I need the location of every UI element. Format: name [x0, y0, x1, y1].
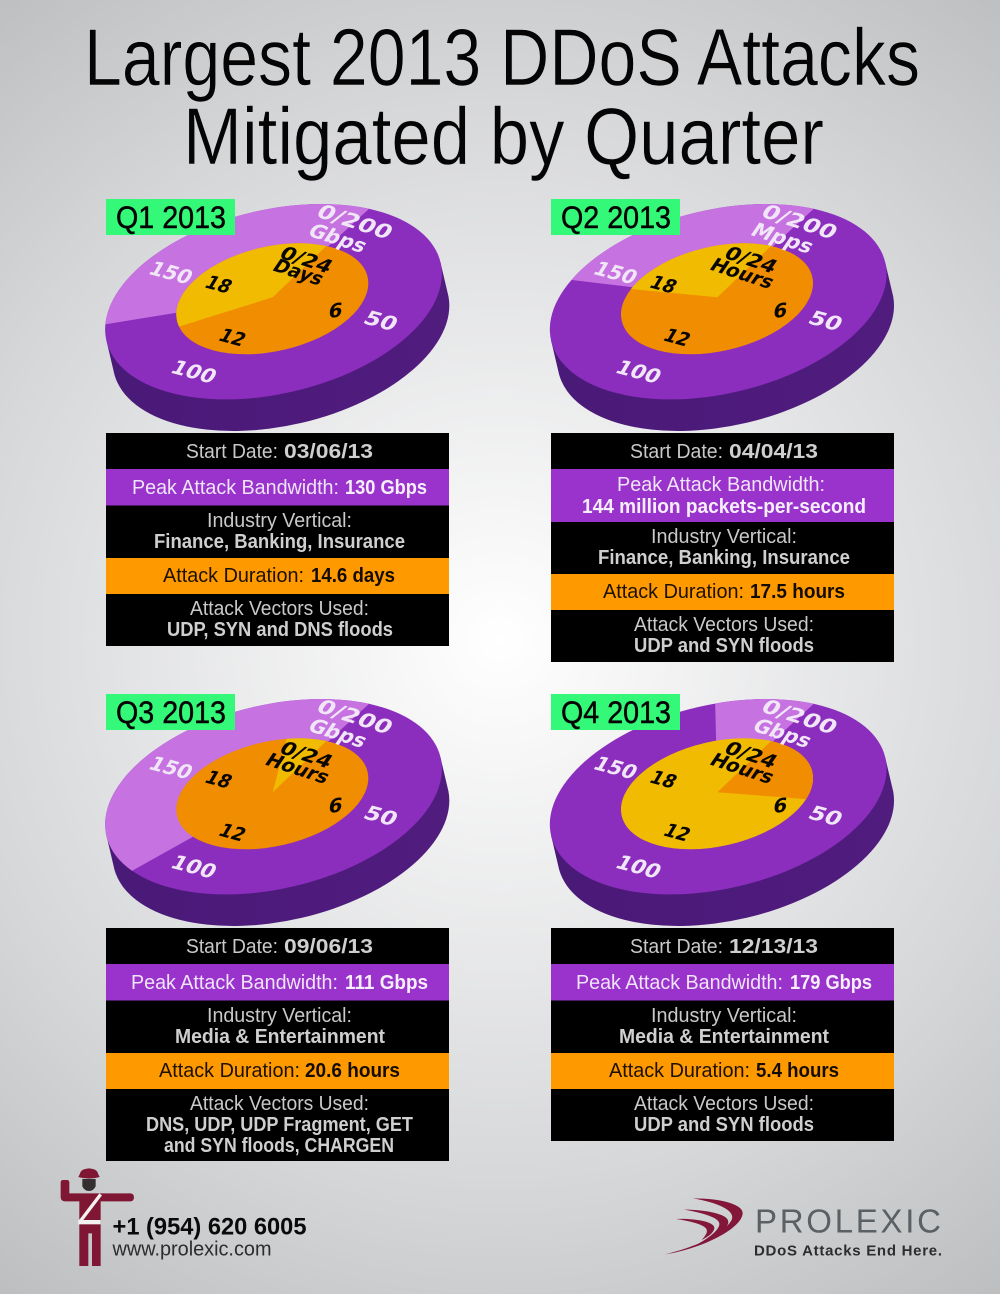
pie chart: Q3 bandwidth and duration: 0/200	[312, 695, 398, 739]
pie chart: Q2 bandwidth and duration: 100	[611, 356, 666, 388]
pie chart: Q1 bandwidth and duration: 150	[144, 257, 198, 289]
pie chart: Q1 bandwidth and duration: 0/200	[312, 200, 398, 244]
pie chart: Q3 bandwidth and duration: 100	[166, 851, 221, 883]
pie chart: Q3 bandwidth and duration: Hours	[261, 749, 335, 788]
data table: Q3 2013: 20.6 hours	[305, 1059, 400, 1082]
data table: Q4 2013	[551, 928, 894, 1141]
data table: Q1 2013	[106, 433, 449, 646]
pie chart: Q4 bandwidth and duration: Gbps	[748, 714, 817, 752]
panel: Q4 2013	[550, 694, 894, 1141]
pie chart: Q4 bandwidth and duration: 150	[589, 752, 642, 784]
panel: Q1 2013	[105, 199, 450, 646]
icon: Prolexic swoosh	[665, 1198, 743, 1254]
pie chart: Q3 bandwidth and duration: Gbps	[303, 714, 372, 752]
panel: Q3 2013	[105, 694, 450, 1161]
pie chart: Q3 bandwidth and duration: 0/24	[275, 737, 338, 773]
pie chart: Q4 bandwidth and duration: 6	[772, 793, 789, 818]
pie chart: Q2 bandwidth and duration: 12	[659, 324, 695, 351]
logo: Prolexic: DDoS Attacks End Here.	[754, 1243, 942, 1260]
data table: Q4 2013: UDP and SYN floods	[634, 1113, 814, 1136]
contact details	[112, 1214, 307, 1261]
data table: Q3 2013: Start Date:	[186, 935, 278, 958]
data table: Q1 2013: UDP, SYN and DNS floods	[167, 618, 393, 641]
data table: Q1 2013: Peak Attack Bandwidth:	[132, 476, 339, 499]
data table: Q2 2013: Peak Attack Bandwidth:	[617, 473, 825, 496]
data table: Q4 2013: 12/13/13	[729, 935, 818, 958]
pie chart: Q3 bandwidth and duration: 150	[144, 752, 198, 784]
pie chart: Q4 bandwidth and duration: 12	[659, 819, 695, 846]
data table: Q3 2013: DNS, UDP, UDP Fragment, GET	[146, 1113, 413, 1136]
label: Q3 2013: Q3 2013	[116, 694, 226, 730]
data table: Q4 2013: Peak Attack Bandwidth:	[576, 971, 783, 994]
data table: Q1 2013: 03/06/13	[284, 440, 373, 463]
data table: Q1 2013: Attack Duration:	[163, 564, 304, 587]
contact details: www.prolexic.com	[112, 1239, 272, 1261]
data table: Q1 2013: Finance, Banking, Insurance	[154, 530, 405, 553]
data table: Q3 2013: Peak Attack Bandwidth:	[131, 971, 338, 994]
pie chart: Q2 bandwidth and duration: 6	[772, 298, 789, 323]
data table: Q4 2013: Media & Entertainment	[619, 1025, 829, 1048]
pie chart: Q1 bandwidth and duration	[105, 204, 450, 431]
logo: Prolexic: PROLEXIC	[755, 1203, 941, 1240]
pie chart: Q3 bandwidth and duration: 6	[327, 793, 344, 818]
pie chart: Q4 bandwidth and duration: 18	[645, 766, 681, 793]
pie chart: Q4 bandwidth and duration: 50	[804, 801, 847, 830]
contact details: +1 (954) 620 6005	[112, 1214, 306, 1240]
data table: Q2 2013: Attack Duration:	[603, 580, 744, 603]
data table: Q2 2013: Start Date:	[630, 440, 723, 463]
data table: Q3 2013: 09/06/13	[284, 935, 373, 958]
data table: Q3 2013: and SYN floods, CHARGEN	[164, 1134, 394, 1157]
title	[84, 13, 920, 182]
pie chart: Q2 bandwidth and duration: 0/200	[757, 200, 843, 244]
data table: Q2 2013: 04/04/13	[729, 440, 818, 463]
pie chart: Q1 bandwidth and duration: 50	[359, 306, 403, 335]
data table: Q3 2013	[106, 928, 449, 1161]
pie chart: Q3 bandwidth and duration	[105, 699, 450, 926]
panel: Q2 2013	[550, 199, 894, 662]
data table: Q4 2013: Attack Vectors Used:	[634, 1092, 814, 1115]
data table: Q3 2013: Attack Vectors Used:	[190, 1092, 369, 1115]
pie chart: Q2 bandwidth and duration: 50	[804, 306, 847, 335]
data table: Q1 2013: Start Date:	[186, 440, 278, 463]
data table: Q4 2013: Industry Vertical:	[651, 1004, 797, 1027]
data table: Q4 2013: Start Date:	[630, 935, 723, 958]
label: Q1 2013: Q1 2013	[116, 199, 226, 235]
pie chart: Q1 bandwidth and duration: 6	[327, 298, 344, 323]
data table: Q2 2013: Industry Vertical:	[651, 525, 797, 548]
pie chart: Q2 bandwidth and duration: 0/24	[720, 242, 782, 278]
pie chart: Q4 bandwidth and duration	[550, 699, 894, 926]
pie chart: Q2 bandwidth and duration: Hours	[705, 254, 779, 293]
data table: Q2 2013: UDP and SYN floods	[634, 634, 814, 657]
data table: Q3 2013: 111 Gbps	[345, 971, 428, 994]
title: Mitigated by Quarter	[183, 92, 824, 182]
data table: Q2 2013: 144 million packets-per-second	[582, 495, 866, 518]
data table: Q4 2013: 5.4 hours	[756, 1059, 839, 1082]
pie chart: Q3 bandwidth and duration: 50	[359, 801, 403, 830]
data table: Q4 2013: 179 Gbps	[790, 971, 872, 994]
label: Q2 2013: Q2 2013	[561, 199, 671, 235]
pie chart: Q1 bandwidth and duration: 12	[214, 324, 250, 351]
pie chart: Q4 bandwidth and duration: Hours	[705, 749, 779, 788]
data table: Q3 2013: Industry Vertical:	[207, 1004, 352, 1027]
data table: Q2 2013: Finance, Banking, Insurance	[598, 546, 850, 569]
data table: Q3 2013: Attack Duration:	[159, 1059, 300, 1082]
data table: Q3 2013: Media & Entertainment	[175, 1025, 385, 1048]
data table: Q1 2013: 14.6 days	[311, 564, 395, 587]
icon: traffic policeman	[61, 1168, 134, 1266]
data table: Q2 2013: Attack Vectors Used:	[634, 613, 814, 636]
data table: Q1 2013: Attack Vectors Used:	[190, 597, 369, 620]
pie chart: Q1 bandwidth and duration: Days	[268, 255, 329, 290]
data table: Q2 2013: 17.5 hours	[750, 580, 845, 603]
data table: Q2 2013	[551, 433, 894, 662]
pie chart: Q1 bandwidth and duration: 0/24	[275, 242, 338, 278]
pie chart: Q1 bandwidth and duration: Gbps	[303, 219, 372, 257]
data table: Q4 2013: Attack Duration:	[609, 1059, 750, 1082]
pie chart: Q1 bandwidth and duration: 18	[201, 271, 237, 298]
label: Q4 2013: Q4 2013	[561, 694, 671, 730]
data table: Q1 2013: 130 Gbps	[345, 476, 427, 499]
pie chart: Q2 bandwidth and duration: Mpps	[746, 218, 819, 258]
pie chart: Q2 bandwidth and duration: 150	[589, 257, 642, 289]
pie chart: Q2 bandwidth and duration	[550, 204, 894, 431]
pie chart: Q4 bandwidth and duration: 0/200	[757, 695, 843, 739]
data table: Q1 2013: Industry Vertical:	[207, 509, 352, 532]
pie chart: Q2 bandwidth and duration: 18	[645, 271, 681, 298]
pie chart: Q3 bandwidth and duration: 12	[214, 819, 250, 846]
pie chart: Q4 bandwidth and duration: 100	[611, 851, 666, 883]
pie chart: Q4 bandwidth and duration: 0/24	[720, 737, 782, 773]
pie chart: Q3 bandwidth and duration: 18	[201, 766, 237, 793]
logo: Prolexic	[665, 1198, 942, 1260]
pie chart: Q1 bandwidth and duration: 100	[166, 356, 221, 388]
